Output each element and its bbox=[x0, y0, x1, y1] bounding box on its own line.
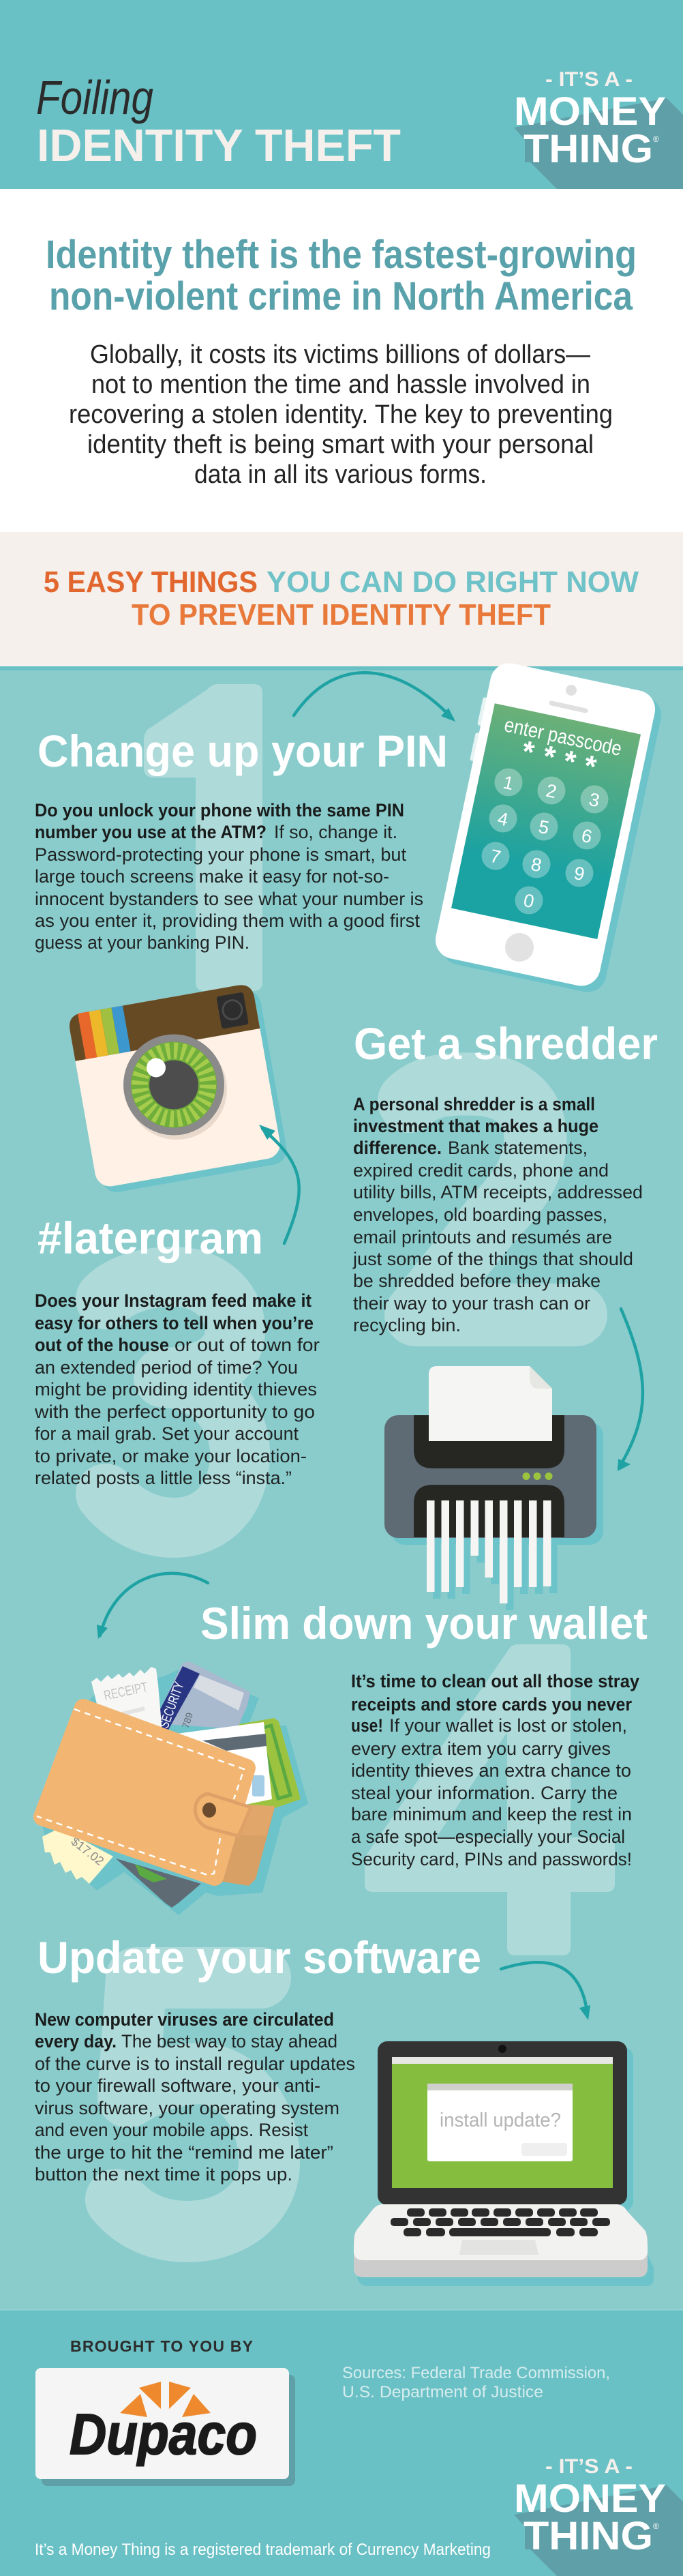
text: tip 4: identity thieves an extra chance to bbox=[351, 1760, 631, 1781]
text: tip 2 bbox=[352, 1094, 643, 1335]
panel: footer bbox=[0, 2309, 683, 2576]
intro heading: Identity theft is the fastest-growing bbox=[46, 233, 637, 277]
logo: It's a Money Thing footer: ® bbox=[653, 2521, 659, 2531]
text: tip 5: virus software, your operating system bbox=[35, 2098, 339, 2118]
text: tip 3: or out of town for bbox=[174, 1335, 320, 1355]
text: tip 3: to private, or make your location- bbox=[35, 1446, 307, 1466]
panel: header bbox=[0, 0, 683, 189]
text: tip 5: of the curve is to install regular updates bbox=[35, 2054, 355, 2074]
text: tip 3: out of the house bbox=[35, 1335, 169, 1355]
heading: change up your PIN: Change up your PIN bbox=[37, 726, 448, 776]
keypad: 6 bbox=[579, 825, 594, 847]
logo: Dupaco: Dupaco bbox=[70, 2402, 257, 2466]
heading: get a shredder: Get a shredder bbox=[354, 1018, 658, 1069]
text: tip 1: number you use at the ATM? bbox=[35, 822, 267, 842]
text: tip 1: Password-protecting your phone is smart, but bbox=[35, 844, 406, 865]
text: tip 2: envelopes, old boarding passes, bbox=[353, 1204, 607, 1225]
arrow: to camera bbox=[259, 1125, 299, 1243]
text: tip 1 bbox=[35, 800, 423, 953]
screen text: enter passcode bbox=[502, 713, 624, 760]
intro body text: Globally, it costs its victims billions of dollars— bbox=[90, 340, 590, 369]
wallet contents: yellow receipt bbox=[42, 1828, 113, 1884]
wallet contents: bank card bbox=[177, 1722, 272, 1807]
icon: instagram camera bbox=[67, 982, 289, 1196]
arrow: to phone bbox=[294, 672, 455, 722]
wallet contents: receipt bbox=[91, 1667, 162, 1732]
wallet contents: yellow receipt: $17.02 bbox=[69, 1834, 106, 1868]
logo: It's a Money Thing bbox=[514, 68, 683, 189]
icon: shredder bbox=[384, 1366, 603, 1610]
keypad: 8 bbox=[529, 854, 543, 876]
passcode asterisks: * bbox=[581, 749, 600, 784]
text: tip 1: innocent bystanders to see what your number is bbox=[35, 889, 423, 909]
keypad: 9 bbox=[572, 863, 586, 885]
text: tip 4: It’s time to clean out all those stray bbox=[351, 1671, 639, 1691]
text: tip 5: the urge to hit the “remind me later” bbox=[35, 2142, 333, 2163]
logo: It's a Money Thing footer: MONEY bbox=[514, 2476, 666, 2521]
text: tip 3: related posts a little less “insta.” bbox=[35, 1468, 292, 1488]
text: tip 2: difference. bbox=[353, 1138, 442, 1158]
laptop base bbox=[354, 2204, 648, 2277]
text: tip 2: email printouts and resumés are bbox=[353, 1227, 612, 1247]
icon: wallet bbox=[37, 1661, 308, 1915]
icon: laptop bbox=[354, 2041, 654, 2286]
text: tip 4: Security card, PINs and passwords! bbox=[351, 1849, 632, 1869]
text: tip 4: a safe spot—especially your Social bbox=[351, 1826, 625, 1847]
arrow: to laptop bbox=[501, 1962, 590, 2020]
keypad: 3 bbox=[587, 789, 601, 811]
logo: It's a Money Thing: - IT’S A - bbox=[545, 68, 633, 91]
text: tip 2: recycling bin. bbox=[353, 1315, 461, 1335]
text: tip 1: as you enter it, providing them with a good first bbox=[35, 911, 420, 931]
heading: slim down your wallet: Slim down your wallet bbox=[200, 1598, 648, 1648]
logo: It's a Money Thing footer: - IT’S A - bbox=[545, 2455, 633, 2478]
text: tip 3: Does your Instagram feed make it bbox=[35, 1290, 312, 1311]
text: tip 3 bbox=[34, 1290, 320, 1488]
intro body text: data in all its various forms. bbox=[194, 460, 487, 489]
intro body text: not to mention the time and hassle involved in bbox=[91, 370, 590, 399]
intro heading bbox=[46, 233, 637, 319]
panel: 5 easy things banner: YOU CAN DO RIGHT NOW bbox=[267, 565, 639, 599]
numeral 1 bbox=[144, 684, 262, 991]
text: tip 3: with the perfect opportunity to go bbox=[34, 1402, 315, 1422]
wallet stitching bbox=[37, 1709, 244, 1875]
text: tip 4: receipts and store cards you never bbox=[351, 1694, 632, 1715]
wallet contents: security card: 789 bbox=[180, 1711, 195, 1730]
wallet strap bbox=[195, 1794, 275, 1836]
logo: Dupaco bbox=[35, 2368, 295, 2486]
text: tip 2: just some of the things that should bbox=[352, 1249, 633, 1269]
passcode asterisks: * bbox=[519, 735, 538, 770]
text: tip 1: Do you unlock your phone with the same PIN bbox=[35, 800, 404, 820]
text: tip 5: and even your mobile apps. Resist bbox=[35, 2120, 308, 2140]
text: tip 4: bare minimum and keep the rest in bbox=[351, 1804, 632, 1824]
text: tip 4: every extra item you carry gives bbox=[351, 1738, 611, 1759]
keypad: 4 bbox=[496, 808, 510, 830]
logo: It's a Money Thing: MONEY bbox=[514, 89, 666, 134]
arrow: to shredder bbox=[618, 1309, 643, 1471]
text: tip 3: for a mail grab. Set your account bbox=[35, 1423, 299, 1444]
brought to you by: BROUGHT TO YOU BY bbox=[70, 2337, 253, 2355]
icon: phone bbox=[429, 659, 665, 996]
text: tip 1: If so, change it. bbox=[274, 822, 397, 842]
text: tip 3: might be providing identity thieves bbox=[35, 1379, 317, 1400]
wallet contents: security card: SECURITY bbox=[157, 1680, 187, 1730]
keypad: 5 bbox=[536, 816, 551, 838]
intro body text: recovering a stolen identity. The key to preventing bbox=[69, 400, 613, 429]
keypad: 2 bbox=[544, 780, 558, 802]
keyboard bbox=[391, 2208, 610, 2236]
text: tip 2: Bank statements, bbox=[448, 1138, 588, 1158]
title: Identity Theft: IDENTITY THEFT bbox=[37, 120, 401, 171]
keypad bbox=[481, 768, 608, 914]
wallet contents: dark card bbox=[116, 1859, 201, 1908]
sources bbox=[342, 2364, 610, 2401]
arrow: to wallet bbox=[97, 1573, 208, 1639]
keypad: 1 bbox=[501, 772, 515, 794]
panel: 5 easy things banner bbox=[0, 532, 683, 668]
text: tip 4: steal your information. Carry the bbox=[351, 1783, 618, 1803]
sources: Sources: Federal Trade Commission, bbox=[342, 2364, 610, 2382]
numeral 4 bbox=[365, 1644, 615, 1955]
text: tip 5: button the next time it pops up. bbox=[35, 2164, 292, 2185]
text: tip 5: New computer viruses are circulated bbox=[35, 2009, 334, 2030]
keypad: 7 bbox=[488, 846, 502, 868]
text: tip 1: guess at your banking PIN. bbox=[35, 932, 249, 953]
numeral 5 bbox=[116, 1978, 269, 2232]
heading: update your software: Update your software bbox=[37, 1932, 481, 1983]
intro body text: identity theft is being smart with your personal bbox=[87, 430, 594, 459]
wallet back flap bbox=[218, 1807, 275, 1886]
numeral 3 bbox=[106, 1277, 240, 1528]
wallet body bbox=[42, 1708, 247, 1877]
wallet contents: receipt: RECEIPT bbox=[102, 1680, 149, 1704]
install dialog: install update? bbox=[440, 2109, 561, 2131]
text: tip 2: A personal shredder is a small bbox=[353, 1094, 595, 1114]
text: tip 5: The best way to stay ahead bbox=[121, 2031, 337, 2052]
title: Foiling: Foiling bbox=[36, 71, 153, 124]
trademark note: It’s a Money Thing is a registered trademark of Currency Marketing bbox=[35, 2541, 491, 2559]
heading: latergram: #latergram bbox=[37, 1213, 263, 1263]
text: tip 3: easy for others to tell when you’re bbox=[35, 1313, 314, 1333]
panel: tips background bbox=[0, 666, 683, 2309]
text: tip 3: an extended period of time? You bbox=[35, 1357, 298, 1378]
text: tip 2: be shredded before they make bbox=[353, 1271, 601, 1291]
numeral 2 bbox=[409, 1084, 576, 1315]
panel: 5 easy things banner: TO PREVENT IDENTITY THEFT bbox=[132, 598, 551, 632]
text: tip 5: to your firewall software, your anti- bbox=[35, 2075, 320, 2096]
intro body text bbox=[69, 340, 613, 489]
keypad: 0 bbox=[521, 890, 536, 912]
logo: It's a Money Thing: ® bbox=[653, 134, 659, 144]
text: tip 5 bbox=[35, 2009, 355, 2185]
text: tip 5: every day. bbox=[35, 2031, 117, 2052]
logo: It's a Money Thing footer: THING bbox=[523, 2514, 653, 2558]
logo: It's a Money Thing: THING bbox=[523, 127, 653, 171]
wallet contents: security card bbox=[153, 1661, 250, 1731]
text: tip 4: use! bbox=[351, 1715, 383, 1736]
text: tip 1: large touch screens make it easy for not-so- bbox=[35, 866, 389, 887]
logo: It's a Money Thing footer bbox=[514, 2455, 683, 2576]
text: tip 4: If your wallet is lost or stolen, bbox=[389, 1715, 627, 1736]
sources: U.S. Department of Justice bbox=[342, 2383, 543, 2401]
passcode asterisks: * bbox=[560, 744, 579, 780]
passcode asterisks: * bbox=[540, 739, 559, 775]
panel: 5 easy things banner: 5 EASY THINGS bbox=[44, 565, 258, 599]
panel: intro bbox=[0, 189, 683, 532]
text: tip 4 bbox=[351, 1671, 639, 1869]
wallet contents: green bill bbox=[222, 1718, 301, 1876]
text: tip 2: investment that makes a huge bbox=[353, 1116, 598, 1136]
passcode asterisks bbox=[519, 735, 600, 784]
text: tip 2: their way to your trash can or bbox=[353, 1293, 590, 1314]
install dialog bbox=[427, 2084, 573, 2161]
text: tip 2: utility bills, ATM receipts, addressed bbox=[353, 1182, 643, 1202]
text: tip 2: expired credit cards, phone and bbox=[353, 1160, 609, 1181]
